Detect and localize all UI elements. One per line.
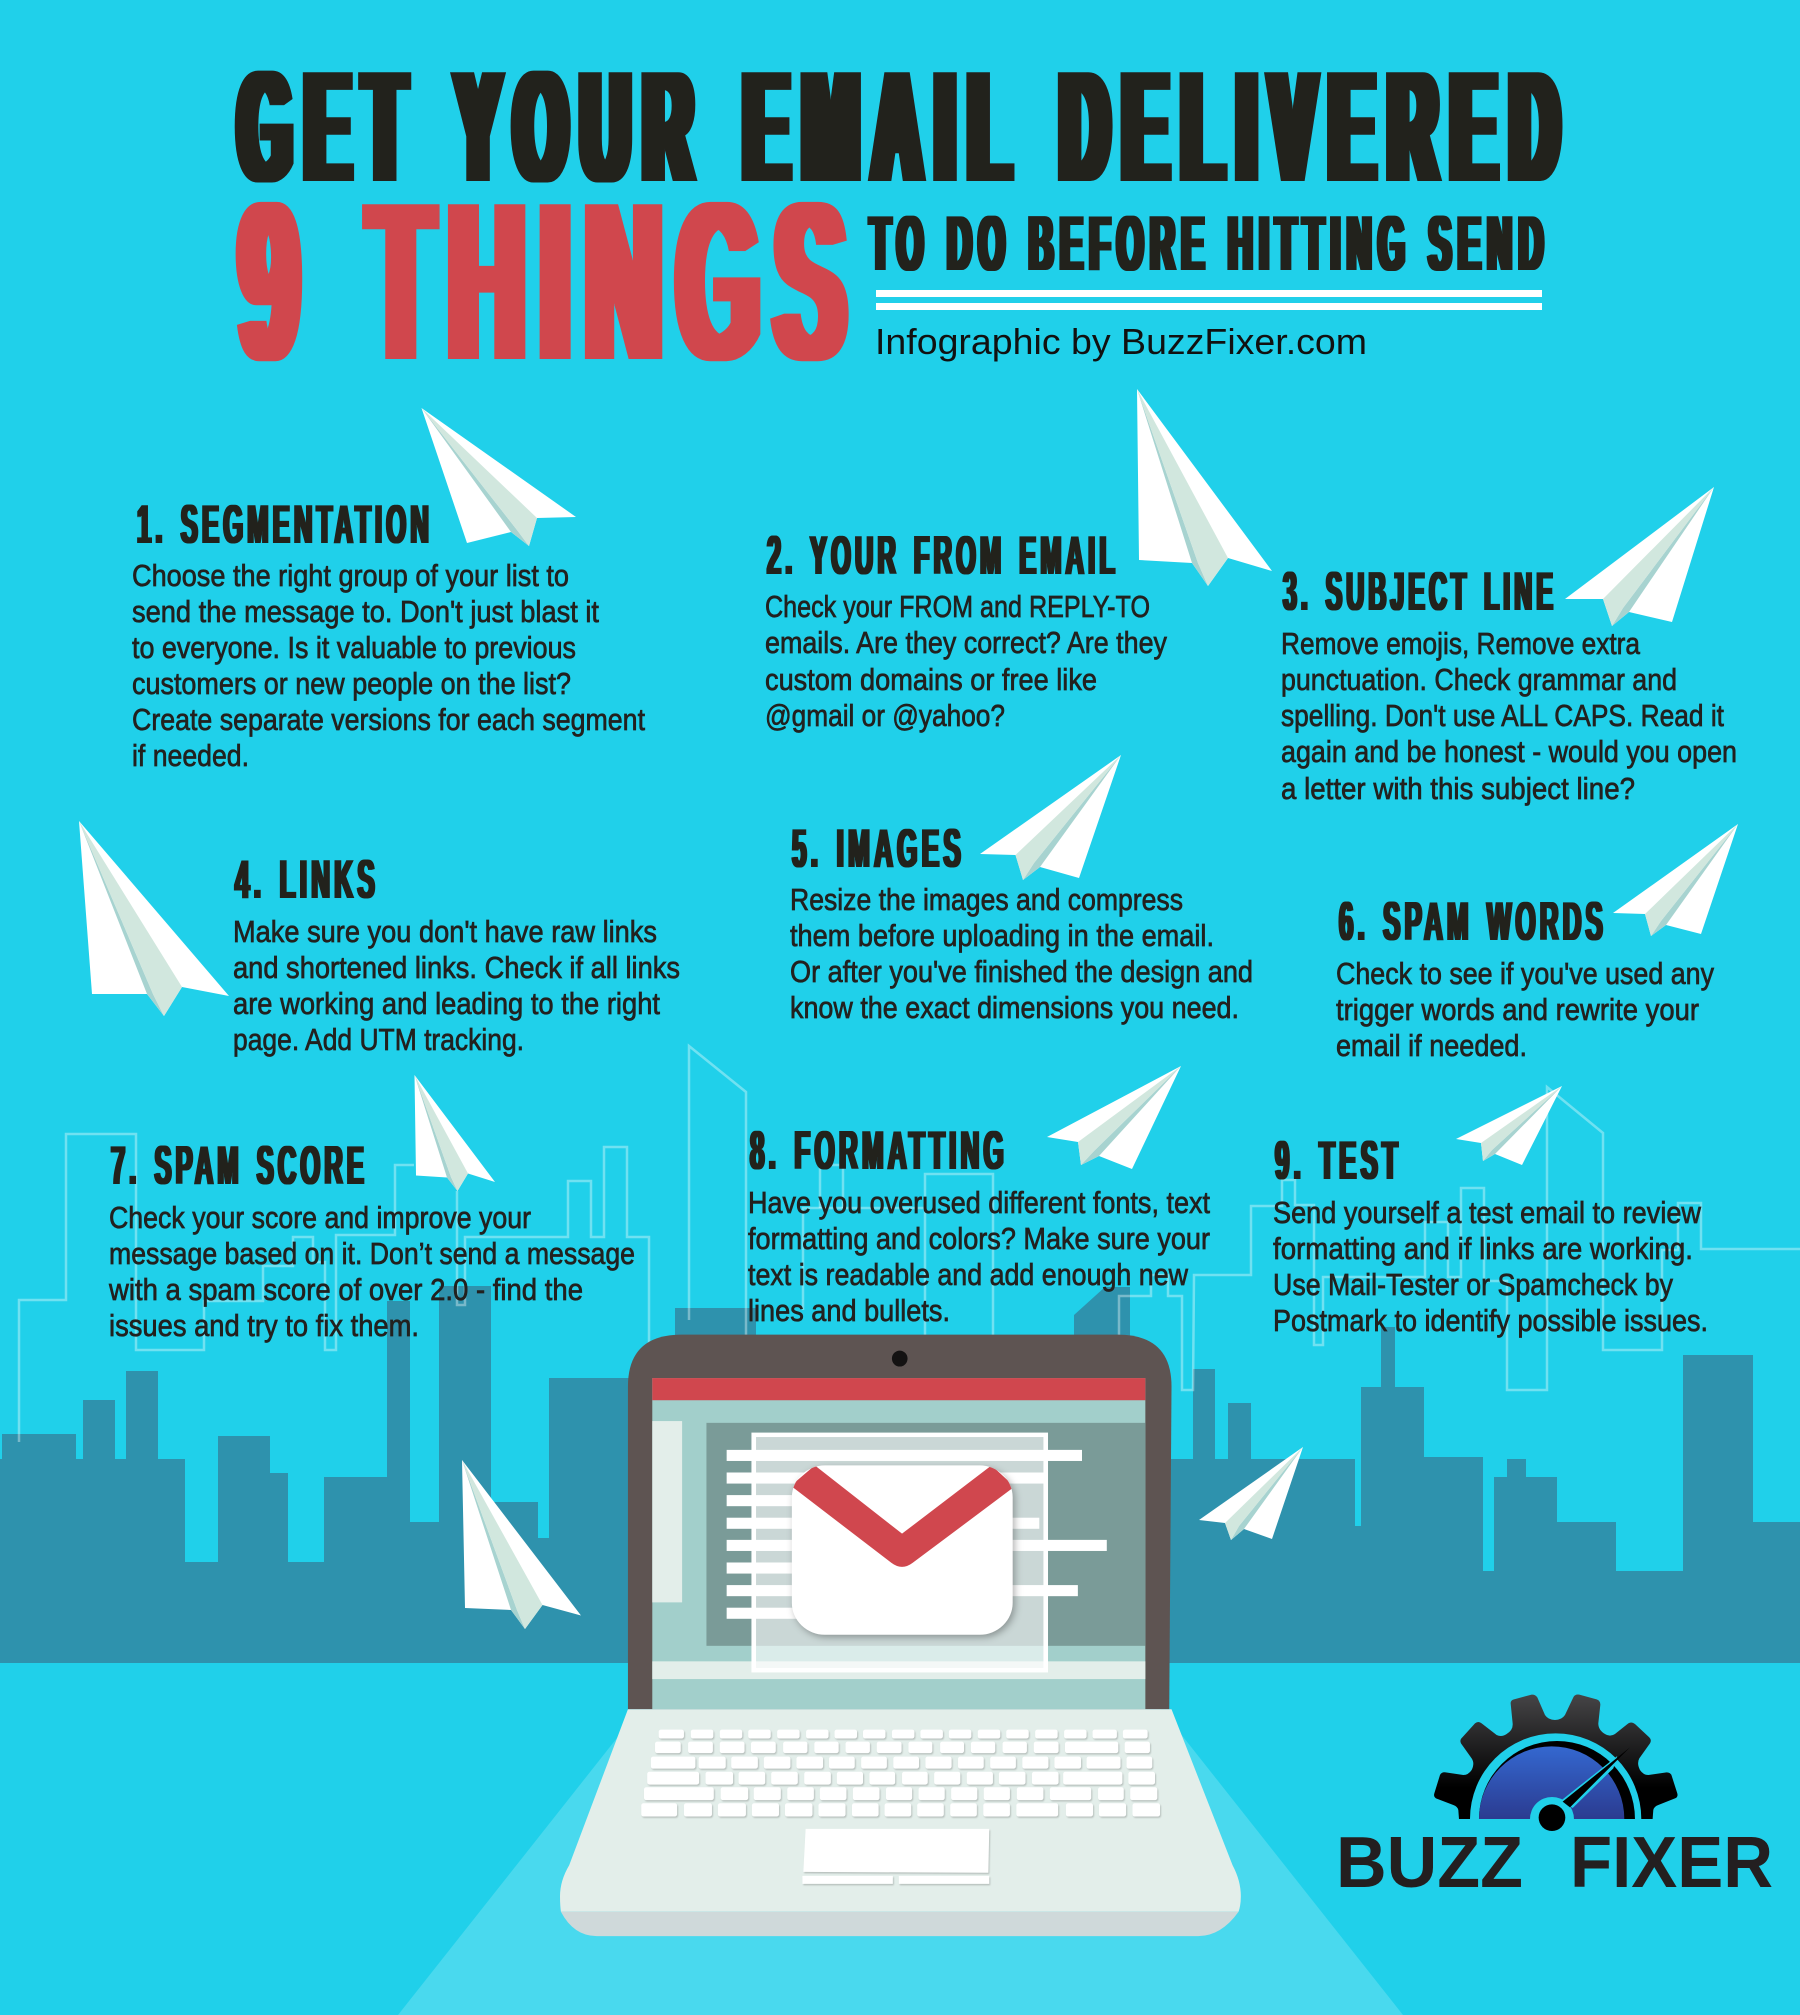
body 3: Remove emojis, Remove extra <box>1281 626 1641 661</box>
double rule <box>876 290 1542 310</box>
icon: paper plane 7 <box>414 1075 495 1191</box>
icon: paper plane bottom left <box>462 1460 581 1629</box>
body 1: send the message to. Don't just blast it <box>132 594 599 629</box>
logo: Buzz Fixer <box>1336 1695 1773 1903</box>
body 9: Use Mail-Tester or Spamcheck by <box>1273 1267 1673 1302</box>
body 9: Send yourself a test email to review <box>1273 1195 1702 1230</box>
section 9: test: 9. TEST <box>1275 1129 1402 1191</box>
body 1 <box>132 558 645 773</box>
body 7 <box>108 1200 635 1343</box>
section 7: spam score: 7. SPAM SCORE <box>111 1134 368 1196</box>
body 8: formatting and colors? Make sure your <box>748 1221 1210 1256</box>
light beam under laptop <box>398 1700 1403 2015</box>
body 8: Have you overused different fonts, text <box>748 1185 1210 1220</box>
icon: paper plane bottom right <box>1199 1447 1303 1540</box>
screen <box>652 1378 1145 1709</box>
body 4: Make sure you don't have raw links <box>233 914 657 949</box>
logo gear and gauge <box>1434 1695 1678 1842</box>
body 4: are working and leading to the right <box>233 986 660 1021</box>
city skyline silhouette <box>0 1286 1800 1663</box>
body 2: custom domains or free like <box>765 662 1097 697</box>
icon: paper plane 4 <box>79 821 229 1016</box>
body 7: Check your score and improve your <box>109 1200 531 1235</box>
section 5: images: 5. IMAGES <box>792 817 965 879</box>
body 2: Check your FROM and REPLY-TO <box>765 589 1150 624</box>
body 5: Or after you've finished the design and <box>790 954 1253 989</box>
text: 9 THINGS <box>240 155 861 407</box>
section 7: spam score <box>108 1134 635 1343</box>
body 1: Create separate versions for each segment <box>132 702 645 737</box>
body 6 <box>1336 956 1714 1063</box>
laptop base <box>560 1709 1241 1912</box>
section 4: links: 4. LINKS <box>235 848 379 910</box>
icon: paper plane 5 <box>980 755 1121 880</box>
section 1: segmentation: 1. SEGMENTATION <box>137 493 433 555</box>
body 8: lines and bullets. <box>748 1293 950 1328</box>
icon: paper plane 1 <box>422 408 576 546</box>
body 3 <box>1281 626 1737 806</box>
section 2: your from email: 2. YOUR FROM EMAIL <box>767 524 1119 586</box>
laptop lid <box>628 1335 1172 1709</box>
logo wordmark: BUZZ <box>1336 1823 1523 1903</box>
body 1: if needed. <box>132 738 249 773</box>
body 6: Check to see if you've used any <box>1336 956 1714 991</box>
body 3: spelling. Don't use ALL CAPS. Read it <box>1281 698 1724 733</box>
section 2: your from email <box>765 524 1167 733</box>
section 8: formatting: 8. FORMATTING <box>750 1119 1008 1181</box>
section 6: spam words <box>1336 890 1714 1063</box>
section 3: subject line <box>1281 560 1737 806</box>
body 5: know the exact dimensions you need. <box>790 990 1239 1025</box>
body 2 <box>765 589 1167 733</box>
section 8: formatting <box>748 1119 1210 1328</box>
body 4: and shortened links. Check if all links <box>233 950 680 985</box>
body 3: punctuation. Check grammar and <box>1281 662 1677 697</box>
body 4 <box>233 914 680 1057</box>
body 6: email if needed. <box>1336 1028 1527 1063</box>
icon: paper plane 3 <box>1565 487 1714 626</box>
body 9 <box>1273 1195 1708 1338</box>
body 8: text is readable and add enough new <box>748 1257 1189 1292</box>
body 3: again and be honest - would you open <box>1281 734 1737 769</box>
body 9: Postmark to identify possible issues. <box>1273 1303 1708 1338</box>
icon: paper plane 6 <box>1613 824 1738 936</box>
laptop illustration <box>560 1335 1241 1936</box>
body 6: trigger words and rewrite your <box>1336 992 1699 1027</box>
body 7: issues and try to fix them. <box>109 1308 419 1343</box>
trackpad <box>802 1829 989 1884</box>
body 3: a letter with this subject line? <box>1281 771 1635 806</box>
city outline buildings <box>19 1046 1800 1442</box>
body 1: to everyone. Is it valuable to previous <box>132 630 576 665</box>
webcam <box>892 1351 908 1367</box>
icon: paper plane 2 <box>1137 389 1272 586</box>
section 5: images <box>790 817 1253 1025</box>
body 2: @gmail or @yahoo? <box>765 698 1005 733</box>
icon: paper plane 8 <box>1047 1066 1181 1169</box>
body 5: Resize the images and compress <box>790 882 1183 917</box>
body 7: message based on it. Don’t send a message <box>109 1236 635 1271</box>
body 5: them before uploading in the email. <box>790 918 1214 953</box>
body 1: customers or new people on the list? <box>132 666 571 701</box>
body 5 <box>790 882 1253 1025</box>
icon: paper plane 9 <box>1456 1086 1562 1165</box>
body 2: emails. Are they correct? Are they <box>765 625 1167 660</box>
logo: Buzz Fixer: FIXER <box>1570 1823 1773 1903</box>
body 4: page. Add UTM tracking. <box>233 1022 524 1057</box>
body 7: with a spam score of over 2.0 - find the <box>108 1272 583 1307</box>
icon: email envelope <box>791 1465 1015 1635</box>
section 9: test <box>1273 1129 1708 1338</box>
body 1: Choose the right group of your list to <box>132 558 569 593</box>
body 9: formatting and if links are working. <box>1273 1231 1693 1266</box>
body 8 <box>748 1185 1210 1328</box>
section 1: segmentation <box>132 493 645 773</box>
byline: Infographic by BuzzFixer.com <box>875 321 1367 362</box>
keyboard <box>641 1730 1160 1816</box>
section 4: links <box>233 848 680 1057</box>
